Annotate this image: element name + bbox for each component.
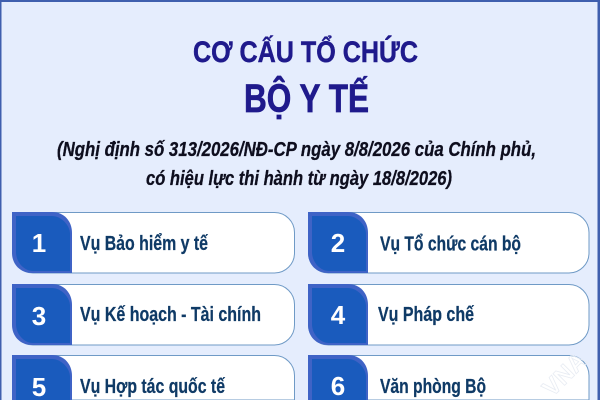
card 1: Vụ Bảo hiểm y tế: [80, 233, 209, 255]
card 5: [12, 355, 294, 400]
title: CƠ CẤU TỔ CHỨC: [193, 35, 418, 69]
card 3: 3: [32, 301, 46, 331]
card 1: 1: [32, 228, 46, 258]
card 3: [12, 284, 294, 345]
title: BỘ Y TẾ: [244, 75, 369, 121]
card 2: [308, 212, 589, 273]
card 6: [308, 355, 589, 400]
subtitle: legal basis: có hiệu lực thi hành từ ngày 18/8/2026): [146, 167, 452, 190]
card 1: [12, 212, 294, 273]
card 2: 2: [331, 228, 345, 258]
subtitle: legal basis: [57, 138, 536, 190]
card 5: Vụ Hợp tác quốc tế: [80, 376, 226, 398]
card 4: 4: [331, 300, 346, 330]
card 4: Vụ Pháp chế: [378, 304, 475, 326]
card 2: Vụ Tổ chức cán bộ: [380, 234, 521, 256]
card 3: Vụ Kế hoạch - Tài chính: [80, 304, 261, 326]
card 6: Văn phòng Bộ: [380, 376, 486, 398]
card 4: [308, 284, 589, 345]
title: [193, 35, 418, 121]
